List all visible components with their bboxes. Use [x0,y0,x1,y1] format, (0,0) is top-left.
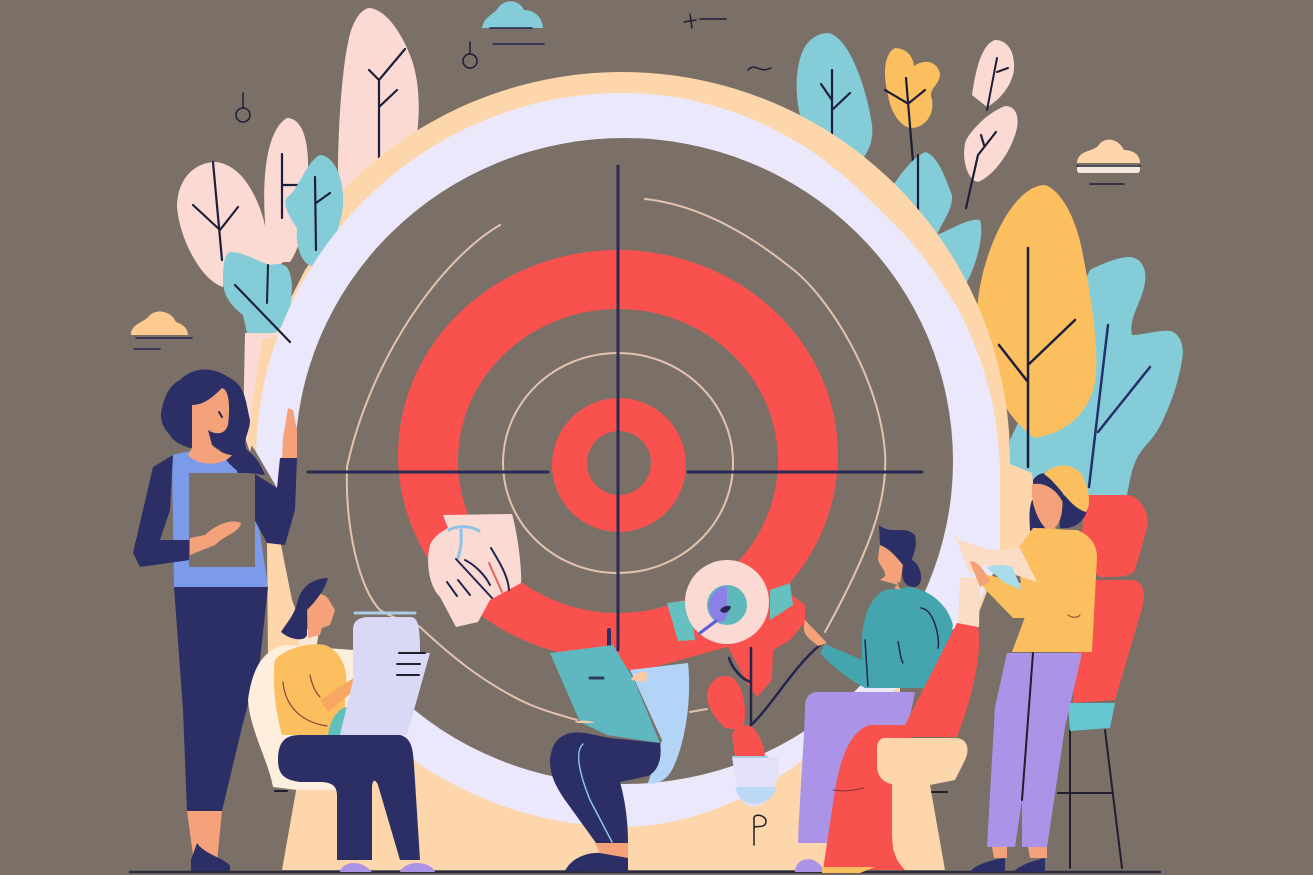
ground line [130,871,1160,873]
target red rings [398,250,838,673]
person: woman on stool with open book [955,465,1148,872]
clouds and small marks [131,1,1140,349]
trees left [177,118,343,333]
tree left: tall pink [338,8,419,210]
crosshair [308,166,922,650]
person: seated with teal tablet [550,630,689,872]
trees right [797,33,1183,495]
gauge dial on the target [667,560,793,644]
target lavender ring [120,93,1200,875]
person: standing woman with clipboard [133,370,297,871]
target thin rings [347,199,885,720]
red plant and pot [707,622,820,845]
person: seated woman with paper [248,578,435,872]
pink tree card on the target [428,514,521,627]
target peach ring and base [150,72,1040,870]
person: seated man in teal [795,525,980,873]
